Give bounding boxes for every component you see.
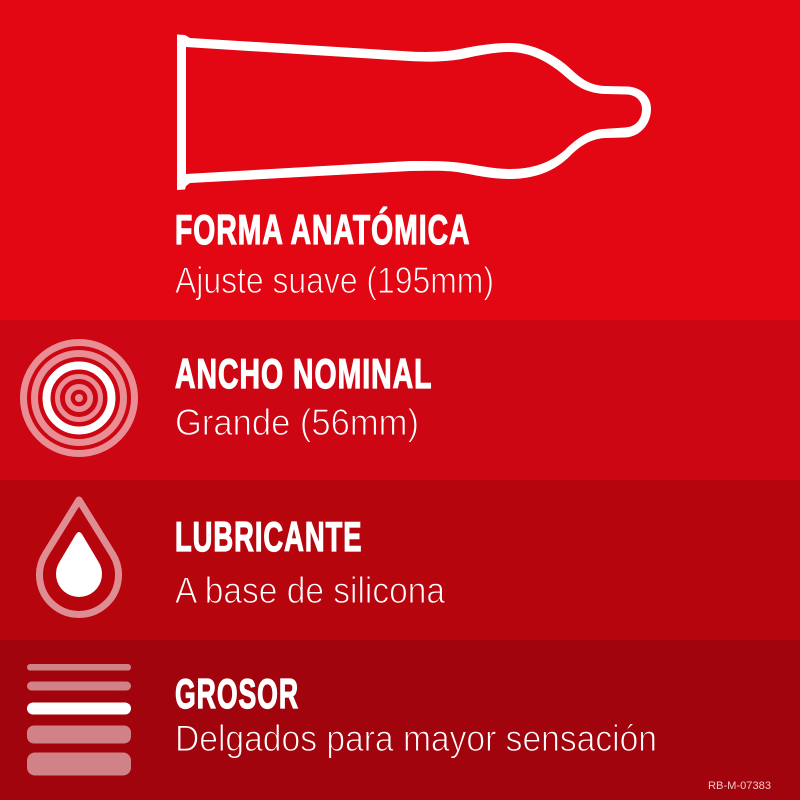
text: ajuste suave: Ajuste suave (195mm) [175, 260, 494, 301]
text: grande: Grande (56mm) [175, 402, 419, 443]
panel: lubricante [0, 480, 800, 640]
icon: concentric rings [24, 342, 134, 454]
heading: lubricante: LUBRICANTE [175, 513, 362, 560]
text: delgados: Delgados para mayor sensación [175, 718, 657, 759]
icon: drop [39, 500, 119, 614]
panel: forma anatómica [0, 0, 800, 320]
text: reference code: RB-M-07383 [708, 780, 771, 792]
text: a base de silicona: A base de silicona [175, 570, 445, 611]
heading: forma anatómica: FORMA ANATÓMICA [175, 205, 470, 253]
heading: grosor: GROSOR [175, 670, 299, 717]
icon: thickness bars [27, 664, 131, 776]
panel: ancho nominal [0, 320, 800, 480]
panel: grosor [0, 640, 800, 800]
icon: anatomical shape outline [177, 34, 651, 190]
heading: ancho nominal: ANCHO NOMINAL [175, 350, 432, 397]
